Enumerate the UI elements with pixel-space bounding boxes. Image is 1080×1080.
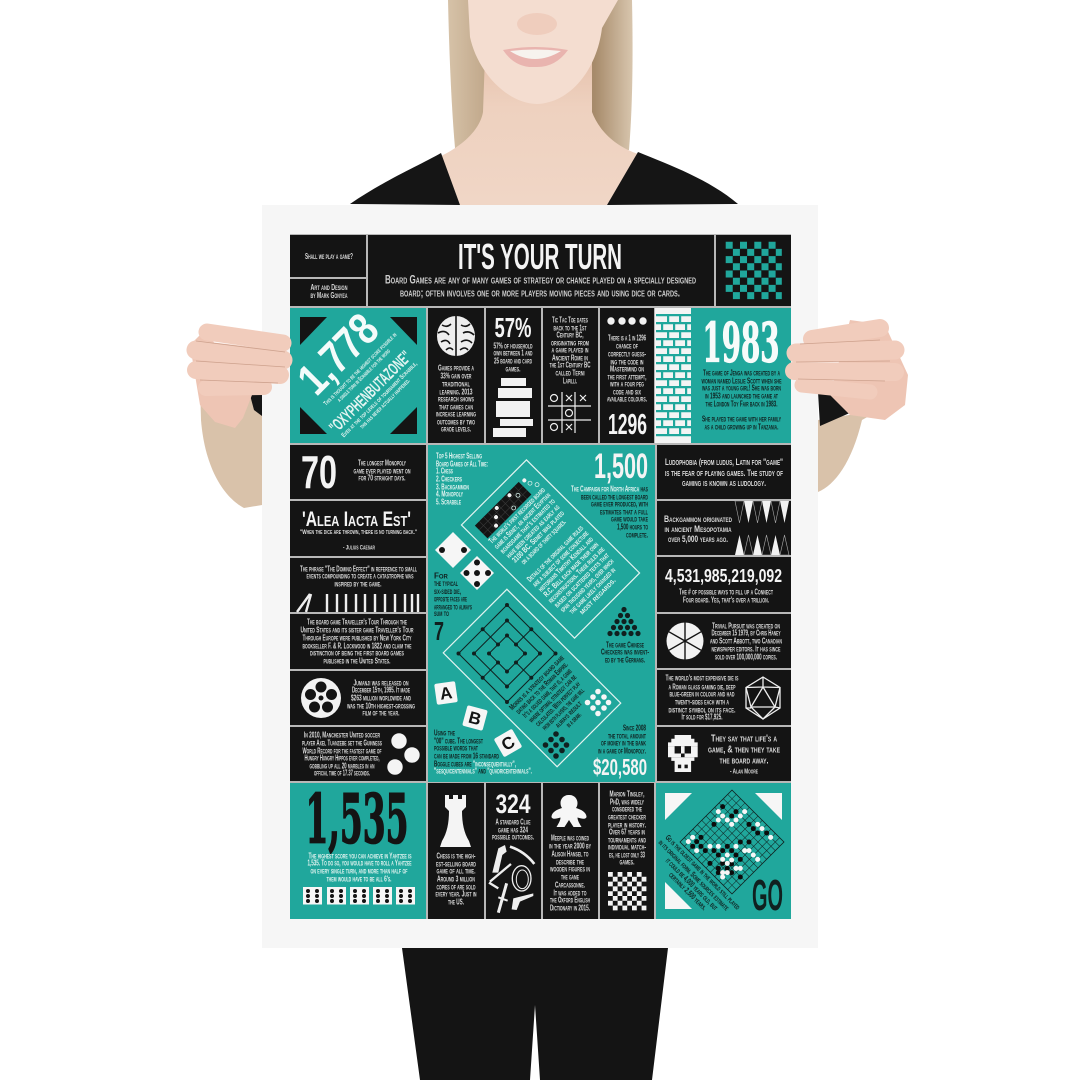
senet text: have been created as early as bbox=[504, 503, 561, 560]
panel: tic tac toe: Ancient Rome in bbox=[552, 354, 588, 362]
senet text: boardgame that's estimated to bbox=[498, 497, 557, 555]
panel: marion tinsley: greatest checker bbox=[608, 812, 646, 822]
panel: tic tac toe bbox=[543, 308, 598, 443]
icon: d20 bbox=[746, 677, 780, 719]
top 5 list bbox=[436, 452, 488, 506]
panel: 57% households: 57% bbox=[494, 312, 532, 343]
panel: jumanji: December 15th, 1995. It made bbox=[352, 686, 410, 694]
panel: 1983 jenga: woman named Leslie Scott when she bbox=[702, 376, 782, 386]
panel: mastermind: chance of bbox=[616, 342, 638, 350]
senet text: the game likely changed in bbox=[567, 566, 617, 616]
quote: They say that life's a bbox=[711, 734, 777, 744]
icon: morris board bbox=[456, 603, 558, 704]
panel: meeple: wooden figures in bbox=[550, 864, 590, 874]
icon: tic tac toe board bbox=[548, 392, 591, 433]
panel: 1,778 scrabble bbox=[279, 297, 428, 446]
panel: 57% households: 57% of household bbox=[494, 342, 533, 350]
panel: ludophobia: is the fear of playing games. The study of bbox=[665, 468, 783, 479]
go rotated text bbox=[657, 833, 742, 912]
monopoly money callout: the total amount bbox=[608, 732, 646, 740]
monopoly money callout bbox=[593, 724, 647, 780]
senet text: Details of the original game rules bbox=[525, 524, 585, 584]
panel: 1,535 yahtzee: them would have to be all 6's. bbox=[326, 874, 392, 884]
1,500 callout: been called the longest board bbox=[581, 492, 648, 502]
senet text: on a board of thirty squares. bbox=[519, 518, 568, 566]
panel: mastermind bbox=[600, 308, 654, 443]
icon: brain bbox=[437, 316, 475, 356]
panel: ludophobia: Ludophobia (from ludus, Latin for "game" bbox=[665, 457, 783, 468]
monopoly money callout: Since 2008 bbox=[623, 724, 646, 732]
panel: 57% households: games. bbox=[506, 364, 520, 374]
chinese checkers fact: ed by the Germans. bbox=[605, 656, 645, 664]
panel: expensive die: twenty-sides each with a bbox=[675, 698, 729, 706]
panel: expensive die: It sold for $17,925. bbox=[682, 712, 722, 722]
panel: chess: est-selling board bbox=[436, 860, 476, 868]
panel: clue: A standard Clue bbox=[496, 818, 530, 826]
letter cube B: B bbox=[466, 708, 483, 729]
boggle fact: possible words that bbox=[434, 744, 478, 752]
panel: domino effect: The phrase "The Domino Effect" in reference to small bbox=[300, 564, 417, 574]
1,500 callout: game ever produced, with bbox=[591, 500, 648, 508]
senet text: based on scattered texts that bbox=[552, 551, 611, 609]
panel: tic tac toe: back to the 1st bbox=[554, 324, 587, 332]
panel: 70 monopoly days: 70 bbox=[301, 446, 337, 498]
panel: alea iacta est: "When the dice are thrown, there is no turning back." bbox=[300, 529, 417, 536]
panel: travellers tour: The board game Traveller's Tour Through the bbox=[307, 618, 407, 626]
panel: connect four number: 4,531,985,219,092 bbox=[665, 566, 782, 586]
boggle fact: can be made from 16 standard bbox=[434, 752, 499, 760]
top 5 list: 5. Scrabble bbox=[436, 498, 461, 506]
morris text: It's a solved game, that is, a game bbox=[521, 667, 574, 720]
panel: 1983 jenga: She played the game with her family bbox=[702, 414, 781, 424]
panel: learning brain: learning. 2013 bbox=[440, 388, 473, 396]
panel: meeple: the Oxford English bbox=[550, 896, 590, 904]
1,500 callout: game would take bbox=[611, 514, 648, 524]
panel: meeple bbox=[543, 783, 598, 919]
boggle fact: Using the bbox=[434, 728, 455, 738]
letter cube A bbox=[434, 681, 458, 705]
title: IT'S YOUR TURN bbox=[458, 236, 622, 277]
dice fact: six-sided die, bbox=[434, 587, 461, 596]
panel: meeple: Dictionary in 2015. bbox=[550, 904, 590, 912]
panel: jumanji: film of the year. bbox=[362, 708, 400, 718]
panel: chess: Chess is the high- bbox=[436, 852, 476, 860]
panel: travellers tour bbox=[290, 614, 426, 669]
1,500 callout: The Campaign for North Africa has bbox=[571, 484, 648, 494]
icon: black stones bbox=[543, 731, 569, 759]
morris text: Morris is a strategy board game bbox=[507, 653, 566, 712]
monopoly money callout: in a game of Monopoly. bbox=[598, 746, 646, 756]
senet text: most regards. bbox=[577, 576, 618, 616]
panel: learning brain: 33% gain over bbox=[440, 372, 472, 380]
panel: 57% households bbox=[486, 308, 541, 443]
panel: 1983 jenga: as a child growing up in Tanzania. bbox=[704, 422, 778, 432]
panel: 1,535 yahtzee: 1,535. To do so, you would have to roll a Yahtzee bbox=[308, 858, 412, 868]
panel: alan moore quote bbox=[657, 727, 791, 781]
boggle fact bbox=[434, 728, 532, 776]
morris text: in a draw. bbox=[564, 710, 583, 729]
panel: meeple: the game bbox=[561, 872, 579, 882]
panel: tic tac toe: the 1st Century BC bbox=[550, 360, 591, 370]
panel: 57% households: 25 board and card bbox=[494, 356, 532, 366]
header panel: checkerboard icon bbox=[716, 235, 791, 306]
boggle fact: "sesquicentennials" and "quadricentennials". bbox=[434, 766, 532, 776]
go rotated text: in its original form. Some sources estimate bbox=[657, 838, 731, 912]
chinese checkers fact: The game Chinese bbox=[606, 640, 644, 650]
header panel: credits: by Mark Gonyea bbox=[310, 291, 348, 300]
panel: chess: game of all time. bbox=[436, 866, 476, 876]
icon: go board bbox=[680, 790, 784, 894]
morris text bbox=[507, 653, 603, 749]
boggle fact: Boggle cubes are "inconsequentially", bbox=[434, 760, 516, 768]
panel: travellers tour: United States and its sister game Traveller's Tour bbox=[300, 626, 414, 634]
letter cube C: C bbox=[498, 732, 518, 755]
icon: backgammon points bbox=[735, 501, 789, 555]
panel: hungry hippos: Hungry Hungry Hippos ever completed, bbox=[304, 754, 380, 762]
panel: marion tinsley: player in history. bbox=[608, 820, 646, 830]
quote: the board away. bbox=[720, 756, 769, 766]
dice fact: sum to bbox=[434, 609, 449, 618]
go rotated text: Go is the oldest game in the world still played bbox=[664, 833, 742, 912]
panel: mastermind: the first attempt, bbox=[608, 372, 646, 382]
dice fact: For bbox=[434, 572, 449, 580]
icon: meeple bbox=[552, 795, 586, 827]
photo: model behind poster bbox=[200, 0, 880, 1080]
panel: 1983 jenga: was just a young girl! She was born bbox=[702, 384, 781, 392]
panel: 1983 jenga: The game of Jenga was created by a bbox=[703, 368, 780, 378]
panel: backgammon: in ancient Mesopotamia bbox=[664, 524, 732, 534]
panel: jumanji bbox=[290, 671, 426, 725]
panel: mastermind: available colours. bbox=[607, 394, 647, 404]
letter cube C bbox=[494, 729, 522, 757]
panel: learning brain: that games can bbox=[439, 402, 473, 412]
photo: right hand gripping poster bbox=[794, 320, 908, 420]
panel: mastermind: ing the code in bbox=[610, 358, 644, 366]
panel: meeple: Carcassonne. bbox=[555, 880, 585, 890]
dice fact: the typical bbox=[434, 579, 458, 588]
panel: chess: the US. bbox=[448, 898, 464, 906]
senet text: The world's first recorded board bbox=[487, 485, 547, 545]
panel: 1,535 yahtzee bbox=[290, 780, 426, 919]
1,500 callout: 1,500 hours to bbox=[617, 522, 648, 532]
header panel: credits: Art and Design bbox=[310, 283, 348, 292]
panel: expensive die: The world's most expensive die is bbox=[666, 674, 738, 682]
panel: centre teal board games bbox=[428, 445, 655, 782]
top 5 list: Board Games of All Time: bbox=[436, 460, 488, 468]
panel: connect four number: The # of possible ways to fill up a Connect bbox=[679, 588, 773, 596]
panel: 70 monopoly days: game ever played went on bbox=[354, 466, 410, 476]
panel: expensive die: blue-green in colour and had bbox=[670, 690, 735, 698]
top 5 list: Top 5 Highest Selling bbox=[436, 452, 482, 460]
panel: trivial pursuit: December 15 1979, by Chris Haney bbox=[712, 628, 780, 638]
quote: - Alan Moore bbox=[730, 768, 758, 776]
panel: trivial pursuit: sold over 100,000,000 copies. bbox=[715, 652, 777, 662]
panel: mastermind: Mastermind on bbox=[610, 364, 644, 374]
panel: chess: every year. Just in bbox=[436, 890, 476, 898]
icon: jenga stack bbox=[493, 378, 533, 437]
icon: film reel bbox=[301, 678, 341, 718]
panel: marion tinsley: Over 67 years in bbox=[609, 828, 645, 836]
senet text: span thousand years, over which bbox=[558, 557, 616, 614]
icon: senet board bbox=[475, 473, 541, 538]
panel: learning brain: outcomes by two bbox=[437, 418, 475, 426]
panel: hungry hippos: In 2010, Manchester United soccer bbox=[304, 730, 380, 740]
1,500 callout: complete. bbox=[626, 530, 648, 540]
panel: jumanji: Jumanji was released on bbox=[354, 678, 408, 688]
icon: triangle of pegs bbox=[607, 607, 641, 636]
dice fact bbox=[434, 572, 472, 646]
panel: 70 monopoly days bbox=[290, 445, 426, 499]
panel: mastermind: correctly guess- bbox=[608, 350, 646, 358]
intro text: board; often involves one or more players moving pieces and using dice or cards. bbox=[400, 288, 680, 300]
panel: jumanji: was the 10th highest-grossing bbox=[347, 702, 415, 710]
icon: die showing five bbox=[460, 556, 494, 590]
panel: alea iacta est bbox=[290, 501, 426, 556]
1,500 callout: 1,500 bbox=[594, 447, 648, 486]
letter cube B bbox=[462, 705, 488, 731]
panel: 1983 jenga: in 1953 and launched the game at bbox=[705, 392, 778, 400]
panel: 1983 jenga: the London Toy Fair back in 1983. bbox=[706, 400, 778, 408]
icon: marbles bbox=[387, 733, 420, 775]
panel: meeple: It was added to bbox=[554, 888, 587, 898]
panel: 70 monopoly days: for 70 straight days. bbox=[358, 474, 406, 482]
top 5 list: 1. Chess bbox=[436, 466, 453, 476]
panel: trivial pursuit: Trivial Pursuit was created on bbox=[712, 622, 780, 630]
quote: game, & then they take bbox=[708, 744, 780, 756]
header panel: tagline bbox=[290, 235, 366, 277]
senet text: game is Senet, an ancient Egyptian bbox=[492, 491, 552, 551]
panel: marion tinsley: Marion Tinsley, bbox=[610, 790, 644, 798]
morris text: always result bbox=[553, 699, 584, 730]
header panel: credits bbox=[290, 279, 366, 306]
panel: expensive die: a Roman glass gaming die, deep bbox=[668, 682, 736, 692]
go rotated text: it could be 4,000 years old, but bbox=[664, 856, 720, 912]
intro text: Board Games are any of many games of strategy or chance played on a specially designed bbox=[385, 274, 696, 286]
panel: backgammon: Backgammon originated bbox=[664, 514, 733, 524]
panel: connect four number: Four board. Yes, that's over a trillion. bbox=[683, 596, 769, 604]
morris text: from both players, the game will bbox=[540, 686, 586, 732]
panel: hungry hippos: official time of 17.37 seconds. bbox=[314, 768, 370, 778]
senet text: R.C. Bell each made their own bbox=[542, 540, 600, 599]
panel: tic tac toe: Lapilli. bbox=[563, 376, 577, 386]
panel: clue bbox=[486, 783, 541, 919]
panel: marion tinsley: es, he lost only 33 bbox=[609, 850, 645, 860]
panel: 1983 jenga: 1983 bbox=[702, 310, 780, 374]
panel: trivial pursuit: and Scott Abbott, two Canadian bbox=[710, 636, 782, 646]
header panel: title and intro bbox=[368, 235, 714, 306]
panel: learning brain: increase learning bbox=[436, 410, 476, 418]
panel: marion tinsley: considered the bbox=[612, 804, 642, 814]
panel: learning brain: traditional bbox=[442, 380, 470, 388]
panel: alea iacta est: - Julius Caesar bbox=[343, 544, 375, 552]
panel: meeple: Alison Hansel to bbox=[552, 850, 589, 858]
monopoly money callout: of money in the bank bbox=[601, 738, 646, 748]
panel: learning brain: grade levels. bbox=[441, 424, 471, 434]
top 5 list: 2. Checkers bbox=[436, 474, 462, 484]
senet board card bbox=[461, 460, 640, 638]
panel: clue: game has 324 bbox=[498, 826, 528, 834]
poster sheet bbox=[262, 205, 818, 948]
panel: marion tinsley bbox=[600, 783, 654, 919]
panel: marion tinsley: tournaments and bbox=[608, 836, 646, 844]
letter cube A: A bbox=[439, 683, 453, 704]
panel: chess: Around 3 million bbox=[437, 874, 475, 884]
panel: tic tac toe: Century BC, bbox=[556, 330, 584, 340]
panel: hungry hippos: gobbling up all 20 marbles in an bbox=[310, 762, 374, 770]
panel: marion tinsley: PhD, was widely bbox=[610, 798, 644, 806]
panel: learning brain bbox=[428, 308, 484, 443]
icon: white stones bbox=[585, 689, 611, 716]
morris text: where optimal strategy can be bbox=[527, 673, 578, 724]
icon: jenga brick wall bbox=[655, 308, 691, 443]
top 5 list: 3. Backgammon bbox=[436, 482, 469, 492]
panel: tic tac toe: originating from bbox=[551, 338, 589, 348]
panel: clue: possible outcomes. bbox=[492, 832, 534, 842]
1,500 callout bbox=[571, 447, 648, 540]
icon: die showing two bbox=[435, 532, 471, 568]
panel: trivial pursuit bbox=[657, 614, 791, 668]
panel: hungry hippos: World Record for the fastest game of bbox=[302, 746, 382, 756]
panel: expensive die bbox=[657, 670, 791, 725]
go rotated text: certainly 2,500 years. bbox=[667, 870, 709, 912]
panel: meeple: describe the bbox=[556, 858, 584, 866]
panel: learning brain: Games provide a bbox=[438, 364, 474, 372]
intro text bbox=[385, 274, 696, 300]
panel: 1,778 scrabble: "OXYPHENBUTAZONE" bbox=[325, 347, 415, 437]
panel: 1,778 scrabble: this has never actually happened. bbox=[359, 377, 412, 431]
panel: hungry hippos bbox=[290, 727, 426, 781]
panel: 1,535 yahtzee: 1,535 bbox=[306, 780, 408, 858]
chinese checkers fact bbox=[601, 607, 649, 664]
icon: four pegs bbox=[607, 317, 647, 325]
panel: marion tinsley: games. bbox=[620, 858, 634, 866]
dice fact: opposite faces are bbox=[434, 594, 467, 604]
senet text: are a subject of some conjecture bbox=[530, 529, 590, 589]
panel: jumanji: $263 million worldwide and bbox=[351, 694, 411, 702]
nine mens morris card bbox=[443, 589, 621, 767]
panel: 1,778 scrabble: This is thought to be the highest score possible in bbox=[323, 331, 398, 407]
panel: 1,535 yahtzee: on every single turn, and more than half of bbox=[310, 866, 408, 876]
1,500 callout: estimates that a full bbox=[600, 508, 648, 516]
panel: learning brain: research shows bbox=[438, 394, 474, 404]
panel: ludophobia: gaming is known as ludology. bbox=[682, 478, 766, 489]
panel: 1,778 scrabble: a single turn in Scrabble for the word bbox=[336, 348, 392, 404]
panel: backgammon: over 5,000 years ago. bbox=[668, 534, 728, 544]
panel: domino effect bbox=[290, 558, 426, 612]
panel: domino effect: inspired by the game. bbox=[334, 580, 382, 588]
quote bbox=[708, 734, 780, 776]
panel: expensive die: distinct symbol on its face. bbox=[668, 706, 736, 714]
panel: 70 monopoly days: The longest Monopoly bbox=[358, 458, 406, 468]
senet text: reconstructions. These rules are bbox=[546, 545, 606, 605]
senet text: 3100 BC. Senet was played bbox=[510, 508, 566, 565]
panel: 57% households: own between 1 and bbox=[494, 348, 533, 358]
header panel: tagline: Shall we play a game? bbox=[305, 252, 353, 261]
panel: mastermind: with a four peg bbox=[610, 380, 644, 388]
panel: go bbox=[656, 783, 791, 920]
panel: 1,778 scrabble: 1,778 bbox=[287, 303, 388, 404]
morris text: calculated. With perfect play bbox=[533, 679, 582, 728]
panel: trivial pursuit: newspaper editors. It has since bbox=[712, 644, 780, 654]
panel: meeple: in the year 2000 by bbox=[549, 842, 591, 850]
panel: backgammon bbox=[657, 501, 791, 555]
icon: pixel skull bbox=[668, 735, 698, 772]
dice fact: arranged to always bbox=[434, 602, 472, 612]
panel: ludophobia bbox=[657, 445, 791, 499]
panel: chess bbox=[428, 783, 484, 919]
panel: travellers tour: distinction of being the first board games bbox=[310, 648, 404, 658]
panel: tic tac toe: Tic Tac Toe dates bbox=[552, 316, 588, 324]
panel: mastermind: code and six bbox=[613, 388, 641, 396]
panel: travellers tour: published in the United States. bbox=[324, 656, 390, 666]
icon: clue weapons bbox=[489, 845, 534, 913]
icon: trivial pursuit wheel bbox=[666, 622, 704, 660]
panel: tic tac toe: a game played in bbox=[552, 346, 588, 354]
panel: chess: copies of are sold bbox=[436, 882, 476, 892]
panel: go: GO bbox=[752, 871, 783, 920]
panel: marion tinsley: individual match- bbox=[608, 842, 646, 852]
panel: meeple: Meeple was coined bbox=[551, 834, 589, 842]
dice fact: 7 bbox=[434, 616, 444, 646]
chinese checkers fact: Checkers was invent- bbox=[601, 648, 649, 656]
panel: domino effect: events compounding to create a catastrophe was bbox=[306, 572, 414, 580]
panel: tic tac toe: called Terni bbox=[556, 368, 585, 378]
icon: chess rook bbox=[440, 795, 471, 847]
panel: 1983 jenga bbox=[691, 308, 791, 443]
icon: falling dominoes bbox=[297, 594, 418, 612]
photo: left hand gripping poster bbox=[190, 330, 285, 428]
panel: 1,535 yahtzee: The highest score you can achieve in Yahtzee is bbox=[308, 852, 412, 860]
senet text: historians Timothy Kendall and bbox=[536, 535, 595, 594]
morris text: dating back to the Roman Empire. bbox=[514, 660, 570, 716]
panel: alea iacta est: 'Alea Iacta Est' bbox=[302, 508, 411, 531]
panel: mastermind: There is a 1 in 1296 bbox=[608, 334, 646, 342]
top 5 list: 4. Monopoly bbox=[436, 490, 463, 498]
panel: travellers tour: bookseller F. & R. Lockwood in 1822 and claim the bbox=[302, 642, 412, 650]
icon: five sixes dice bbox=[303, 887, 415, 904]
panel: 1,778 scrabble: Even at the top levels of tournament Scrabble, bbox=[340, 360, 419, 439]
monopoly money callout: $20,580 bbox=[593, 754, 647, 780]
boggle fact: "00" cube. The longest bbox=[434, 736, 483, 746]
panel: mastermind: 1296 bbox=[608, 409, 647, 441]
panel: travellers tour: Through Europe were published by New York City bbox=[302, 634, 412, 642]
icon: checker board bbox=[608, 872, 646, 910]
panel: connect four number bbox=[657, 557, 791, 612]
panel: hungry hippos: player Axel Tuanzebe set the Guinness bbox=[302, 738, 382, 748]
panel: clue: 324 bbox=[496, 789, 530, 819]
senet text bbox=[487, 485, 628, 626]
